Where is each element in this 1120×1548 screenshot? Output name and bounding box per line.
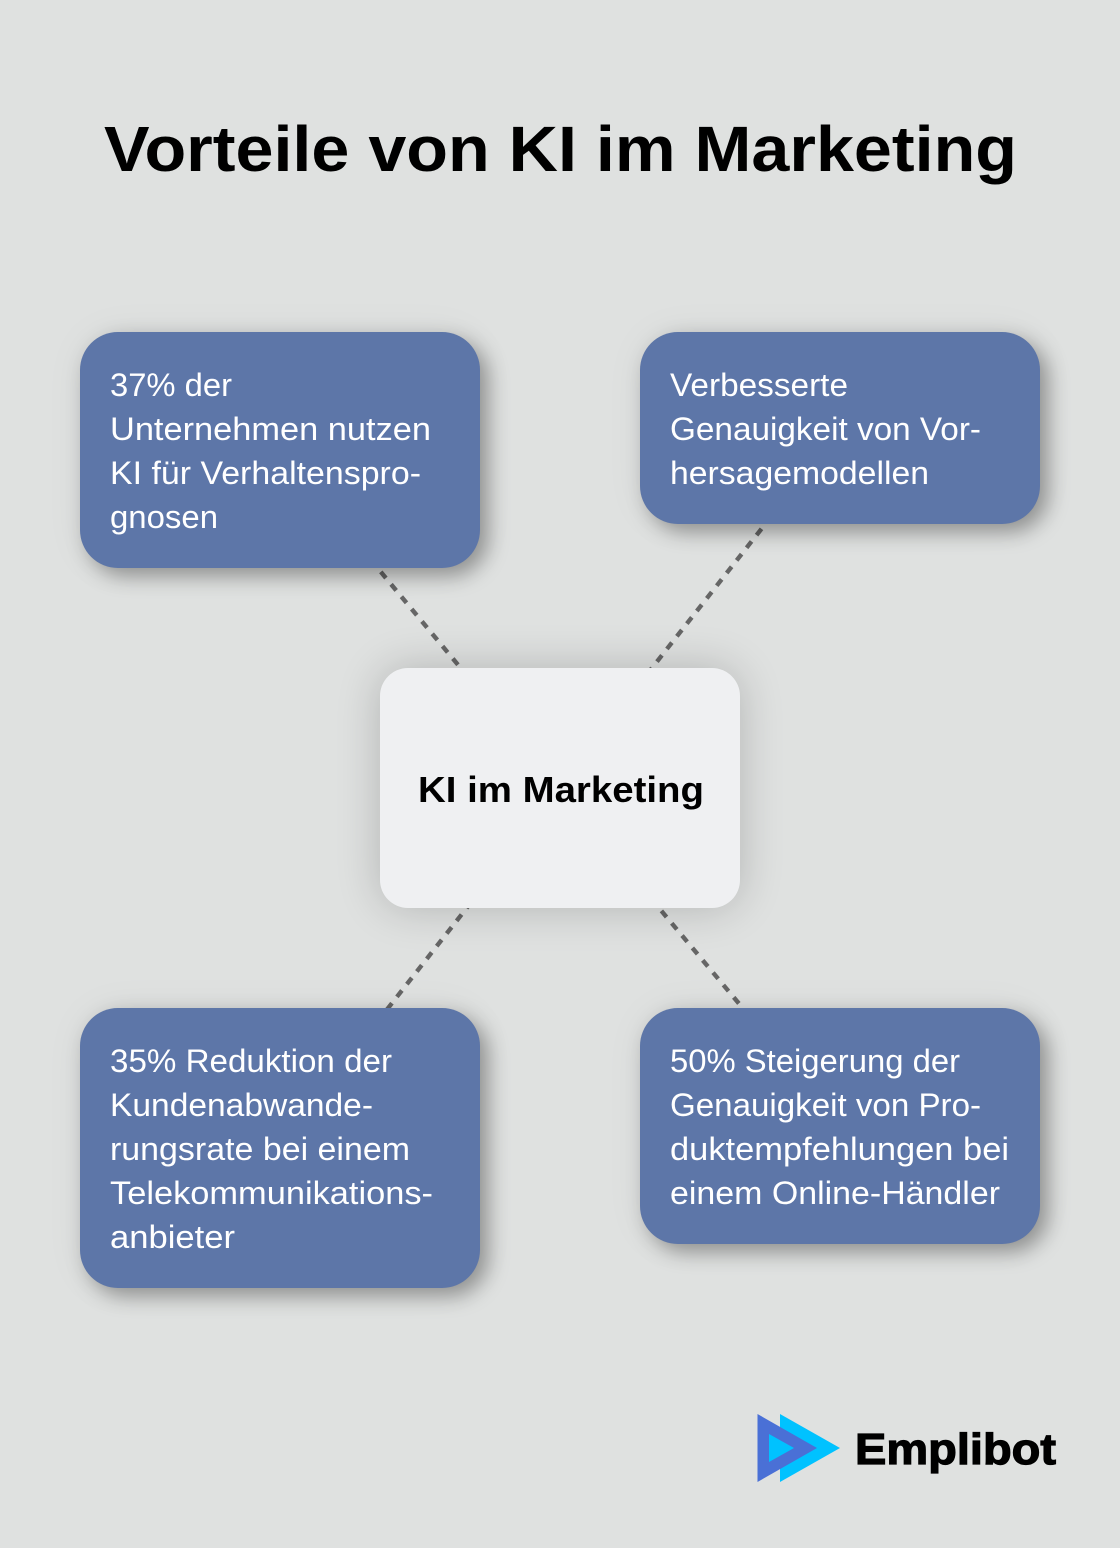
- text: top-left box: gnosen: [110, 499, 218, 535]
- text: top-left box: 37% der: [110, 367, 232, 403]
- text: top-right box: hersagemodellen: [670, 455, 929, 491]
- text: bottom-right box: einem Online-Händler: [670, 1175, 1000, 1211]
- panel: top-right box: [640, 332, 1040, 524]
- text: bottom-right box: Genauigkeit von Pro-: [670, 1087, 981, 1123]
- panel: bottom-right box: [640, 1008, 1040, 1244]
- text: bottom-left box: Kundenabwande-: [110, 1087, 373, 1123]
- text: bottom-right box: duktempfehlungen bei: [670, 1131, 1009, 1167]
- panel: bottom-left box: [80, 1008, 480, 1288]
- title: Vorteile von KI im Marketing: [104, 113, 1017, 185]
- text: bottom-left box: [110, 1043, 433, 1255]
- text: bottom-left box: rungsrate bei einem: [110, 1131, 410, 1167]
- text: top-left box: KI für Verhaltenspro-: [110, 455, 421, 491]
- text: bottom-left box: Telekommunikations-: [110, 1175, 433, 1211]
- text: top-right box: [670, 367, 981, 491]
- logo wordmark: Emplibot: [855, 1425, 1056, 1474]
- logo: Emplibot: [758, 1414, 1056, 1482]
- text: bottom-left box: 35% Reduktion der: [110, 1043, 392, 1079]
- text: top-left box: Unternehmen nutzen: [110, 411, 431, 447]
- panel: top-left box: [80, 332, 480, 568]
- panel: center box: [380, 668, 740, 908]
- text: bottom-right box: 50% Steigerung der: [670, 1043, 960, 1079]
- text: bottom-left box: anbieter: [110, 1219, 235, 1255]
- text: top-right box: Genauigkeit von Vor-: [670, 411, 981, 447]
- text: top-right box: Verbesserte: [670, 367, 848, 403]
- icon: play triangles: [758, 1414, 840, 1482]
- text: top-left box: [110, 367, 431, 535]
- text: center box: KI im Marketing: [418, 769, 704, 810]
- text: bottom-right box: [670, 1043, 1009, 1211]
